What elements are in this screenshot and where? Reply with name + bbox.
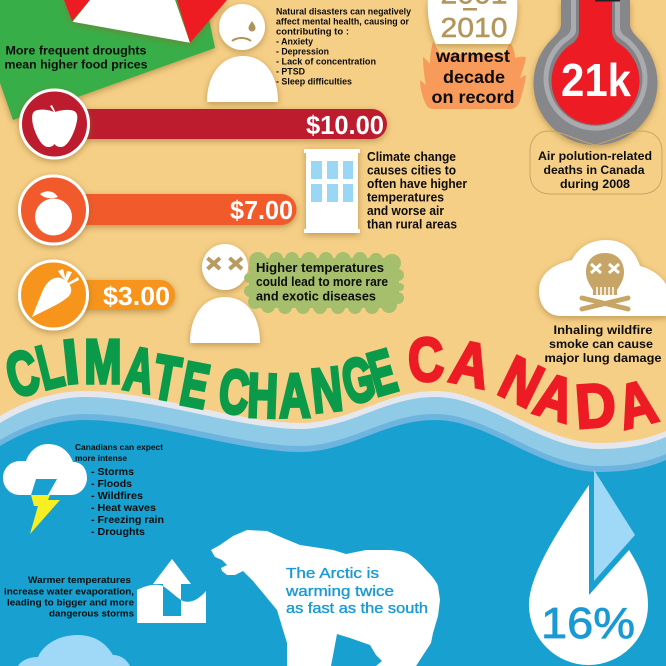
icon: orange fruit (35, 191, 72, 236)
bar: apple 10 dollars (20, 90, 387, 158)
amber circle (20, 261, 88, 329)
text: cities: causes cities to (367, 164, 456, 178)
text: evaporation: Warmer temperatures (28, 575, 131, 586)
callout: air pollution: during 2008 (560, 177, 630, 191)
canada: D (573, 371, 618, 442)
date badge 2001-2010 (420, 0, 526, 109)
text: mental health: contributing to : (276, 26, 349, 38)
callout: air pollution: deaths in Canada (544, 163, 645, 177)
orange circle (20, 176, 88, 244)
flame (420, 42, 526, 109)
text: evaporation: leading to bigger and more (7, 598, 134, 608)
canada (406, 324, 664, 443)
years: 2010 (440, 12, 508, 43)
canada: C (406, 324, 446, 395)
climate change: A (278, 362, 311, 431)
canada: A (610, 367, 664, 443)
bar: orange 7 dollars (20, 176, 296, 244)
panel: droughts (0, 0, 227, 120)
bar: carrot 3 dollars (20, 261, 175, 329)
text: mental health: affect mental health, causing or (276, 16, 409, 28)
text: cities: temperatures (367, 190, 444, 204)
icon: wildfire smoke cloud with skull (539, 240, 666, 365)
price: $10.00 (306, 110, 384, 140)
ocean and shore (0, 391, 666, 666)
text: intense weather list: - Storms (91, 466, 134, 478)
text: evaporation: dangerous storms (49, 608, 134, 620)
climate change: M (84, 328, 122, 397)
warmest decade text: on record (432, 87, 514, 107)
text: mental health: - Lack of concentration (276, 56, 376, 68)
wildfire text: Inhaling wildfire (554, 323, 653, 337)
climate change: I (60, 328, 82, 398)
text: cities: Climate change (367, 150, 456, 164)
callout: diseases: Higher temperatures (256, 261, 384, 275)
sail (594, 470, 635, 581)
thermometer body (534, 0, 658, 145)
green paper (0, 0, 215, 120)
icon: storm cloud with lightning (3, 444, 87, 534)
climate change: C (216, 356, 252, 429)
panel: polar bear (211, 530, 440, 666)
bear silhouette (211, 530, 440, 666)
climate change: A (119, 335, 160, 408)
callout: diseases (244, 252, 404, 314)
climate change: E (361, 336, 404, 409)
canada: N (489, 343, 553, 422)
red circle (20, 90, 88, 158)
text: evaporation: increase water evaporation, (4, 586, 134, 598)
icon: red and white kite (64, 0, 227, 43)
climate change: T (148, 343, 185, 415)
climate change: L (30, 329, 70, 403)
text: intense weather list: more intense (75, 454, 128, 463)
text: mental health: - Sleep difficulties (276, 76, 352, 88)
climate change (0, 328, 404, 432)
text: cities: and worse air (367, 204, 444, 218)
callout: air pollution (530, 131, 662, 194)
climate change: G (336, 344, 381, 418)
drought text: More frequent droughts (6, 44, 146, 58)
icon: carrot (32, 269, 79, 317)
icon: sick person (190, 244, 260, 343)
wildfire text: smoke can cause (549, 337, 653, 351)
red bar (80, 109, 387, 139)
icon: apple (32, 105, 77, 147)
text: intense weather list: - Heat waves (91, 502, 156, 514)
title: climate change canada (0, 324, 664, 443)
text: intense weather list: Canadians can expect (75, 443, 163, 452)
arctic text: The Arctic is (286, 566, 379, 582)
text: intense weather list (75, 443, 164, 538)
climate change: E (175, 350, 214, 423)
climate change: N (308, 355, 346, 427)
text: cities: often have higher (367, 177, 467, 191)
warmest decade text: decade (443, 67, 505, 87)
callout: diseases: could lead to more rare (256, 275, 388, 289)
thermometer (534, 0, 658, 145)
text: cities: than rural areas (367, 218, 457, 232)
text: intense weather list: - Droughts (91, 526, 145, 538)
wildfire text: major lung damage (544, 351, 662, 365)
cloud (539, 240, 666, 316)
amber bar (80, 280, 175, 310)
callout: diseases: and exotic diseases (256, 290, 376, 304)
years (440, 0, 508, 43)
text: intense weather list: - Freezing rain (91, 514, 164, 526)
icon: light blue cloud (18, 635, 130, 666)
icon: sad person (207, 4, 278, 102)
icon: evaporation arrow (137, 559, 206, 623)
price: $3.00 (103, 281, 170, 311)
crossbones (582, 298, 628, 309)
21k: 21k (561, 54, 631, 106)
canada: A (527, 360, 583, 437)
drop (529, 485, 648, 665)
arctic text: warming twice (285, 584, 394, 600)
white badge (428, 0, 517, 44)
mercury (552, 0, 640, 125)
text: mental health: - PTSD (276, 66, 305, 78)
text: mental health: - Anxiety (276, 36, 314, 48)
orange bar (80, 194, 296, 225)
warmest decade text: warmest (435, 46, 510, 66)
climate change: H (246, 362, 279, 432)
drought text: mean higher food prices (4, 58, 148, 72)
arctic text: as fast as the south (286, 601, 428, 617)
climate change: C (0, 337, 46, 411)
text: mental health: Natural disasters can negatively (276, 6, 412, 18)
callout: air pollution: Air polution-related (538, 149, 652, 163)
icon: water drop 16 percent (529, 470, 648, 665)
price: $7.00 (230, 195, 293, 225)
text: intense weather list: - Floods (91, 478, 132, 490)
icon: city building (304, 149, 360, 233)
text: intense weather list: - Wildfires (91, 490, 143, 502)
skull (586, 253, 624, 295)
text: mental health: - Depression (276, 46, 329, 58)
percentage: 16% (541, 599, 635, 648)
canada: A (444, 328, 496, 403)
